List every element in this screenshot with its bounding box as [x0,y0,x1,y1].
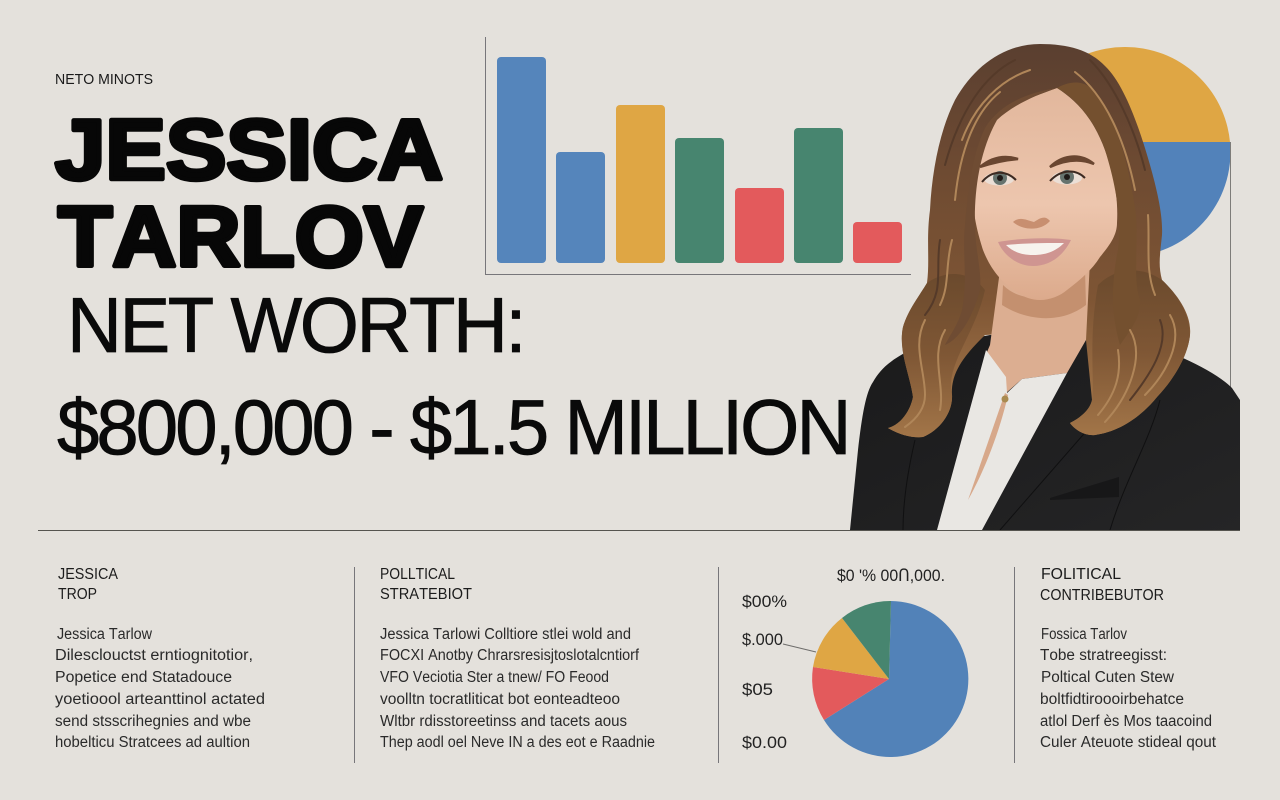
column 1: hobelticu Stratcees ad aultion [55,734,250,751]
jacket pocket [1050,477,1119,500]
decorative pie behind portrait [1020,47,1230,390]
column divider [354,567,356,763]
section divider [38,530,1240,532]
column 2: STRATEBIOT [380,586,472,603]
column 1: send stsscrihegnies and wbe [55,713,251,730]
column 1: Jessica Tarlow [57,626,153,643]
mouth [998,238,1071,266]
eyebrows [980,157,1094,167]
neck shadow [1002,270,1086,318]
column 2: Jessica Tarlowi Colltiore stlei wold and [380,626,631,643]
column 2: VFO Veciotia Ster a tnew/ FO Feood [380,669,609,686]
pie labels [742,592,787,752]
eyebrow label: NETO MINOTS [55,71,153,88]
eyes [982,170,1085,186]
column 4: atlol Derf ès Mos taacoind [1040,713,1212,730]
hair highlights [905,70,1175,427]
column 1: Popetice end Statadouce [55,669,232,686]
pie title: $0 '% 00Ո,000. [837,566,945,585]
neck [987,260,1090,393]
pie chart panel [742,566,968,757]
face [973,88,1117,300]
column divider [1014,567,1016,763]
column 1 [55,566,265,751]
blouse slit [968,393,1008,500]
column 4: FOLITICAL [1041,566,1121,583]
hair [888,44,1190,437]
column 4: Tobe stratreegisst: [1040,647,1167,664]
pie labels: $00% [742,592,787,611]
column 4: Culer Ateuote stideal qout [1040,734,1217,751]
column 2 [380,566,655,751]
column 2: Wltbr rdisstoreetinss and tacets aous [380,713,627,730]
pie labels: $05 [742,680,773,699]
title: JESSICA [55,102,443,197]
column 2: Thep aodl oel Neve IN a des eot e Raadnie [380,734,655,751]
column 4: CONTRIBEBUTOR [1040,587,1164,604]
hair locks over shoulders [888,274,985,437]
bar chart [486,37,911,274]
net worth heading: NET WORTH: [67,282,524,369]
pie labels: $0.00 [742,733,787,752]
pie [812,601,968,757]
column 4: boltfidtiroooirbehatce [1040,691,1184,708]
blouse [937,350,1067,530]
column 4: Fossica Tarlov [1041,626,1127,643]
column 2: POLLTICAL [380,566,455,583]
column 4: Poltical Cuten Stew [1041,669,1175,686]
pie labels: $.000 [742,630,783,649]
column divider [718,567,720,763]
portrait [850,44,1240,530]
jacket [850,335,1240,530]
jacket seams [903,380,1160,530]
net worth value: $800,000 - $1.5 MILLION [57,384,848,471]
title: TARLOV [58,190,423,285]
column 1: JESSICA [58,566,119,583]
necklace [1002,396,1008,402]
column 1: yoetioool arteanttinol actated [55,691,265,708]
column 4 [1040,566,1217,751]
nose [1013,218,1050,229]
pie leader line [783,644,816,652]
column 1: TROP [58,586,97,603]
column 2: voolltn tocratliticat bot eonteadteoo [380,691,620,708]
hair front strands [945,88,1057,345]
column 2: FOCXI Anotby Chrarsresisjtoslotalcntiorf [380,647,640,664]
title [55,102,443,285]
column 1: Dilesclouctst erntiognitotior, [55,647,253,664]
